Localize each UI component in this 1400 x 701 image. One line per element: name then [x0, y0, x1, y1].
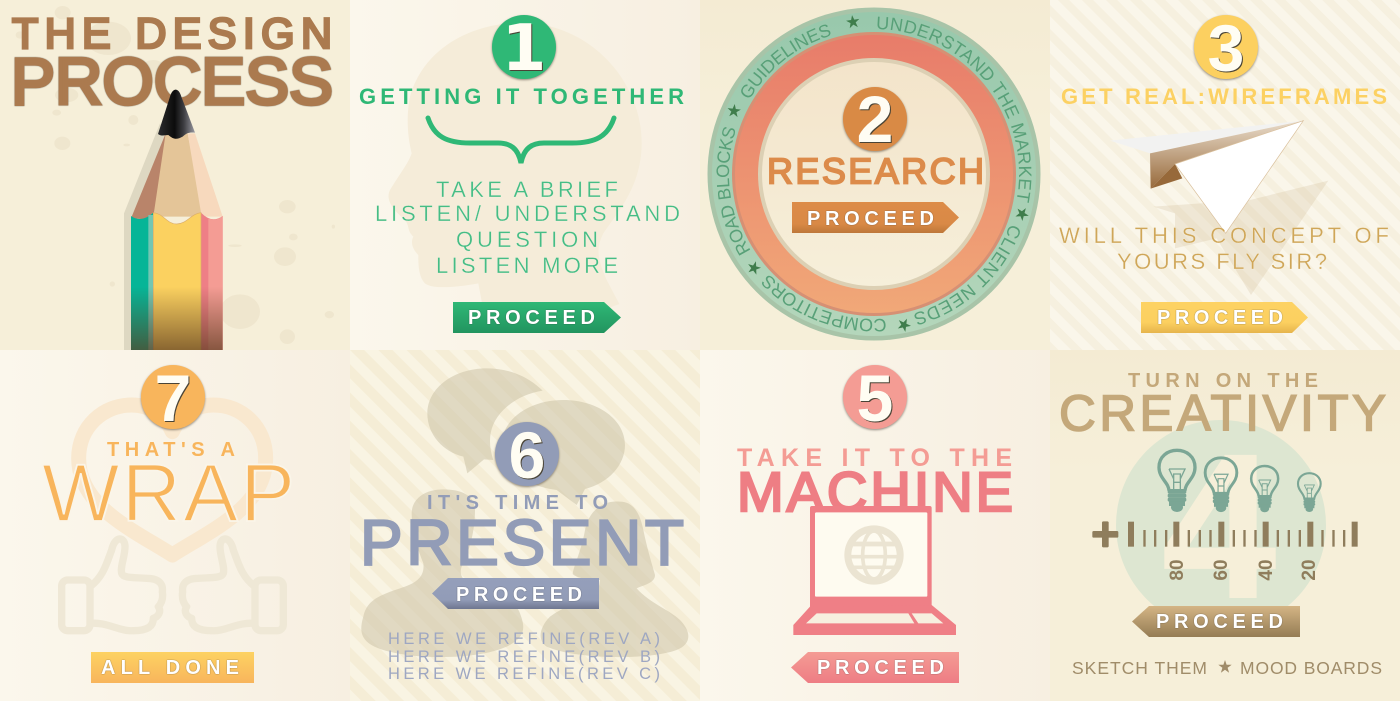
panel: step 2 research — [708, 8, 1040, 340]
green circle backdrop — [1116, 420, 1326, 630]
text block: refinement revisions: HERE WE REFINE(REV B) — [388, 648, 660, 666]
ring stars — [725, 14, 1030, 333]
icon: thumbs up pair — [62, 539, 283, 631]
text block: step 1 tasks: LISTEN/ UNDERSTAND — [375, 201, 680, 226]
panel: step 1 getting it together — [350, 0, 700, 350]
icon: laptop with globe — [793, 506, 956, 635]
heading: the design: THE DESIGN — [12, 10, 332, 58]
step number 7: 7 — [155, 361, 191, 435]
icon: speech bubbles — [427, 368, 625, 505]
text block: step 1 tasks: LISTEN MORE — [436, 253, 618, 278]
icon: paper plane — [1110, 121, 1303, 233]
panel: step 3 wireframes — [1050, 0, 1400, 350]
text block: step 1 tasks — [375, 177, 680, 278]
ring text: research topics — [716, 16, 1032, 332]
heading: wrap: WRAP — [42, 448, 295, 539]
step number 3 — [1194, 11, 1258, 85]
ring text: research topics: COMPETITORS — [762, 276, 886, 332]
text block: concept question: WILL THIS CONCEPT OF — [1059, 223, 1389, 248]
heading: present: PRESENT — [360, 506, 684, 578]
icon: pencil — [124, 90, 223, 351]
icon: head silhouette — [389, 23, 642, 310]
icon: curly brace — [428, 118, 614, 163]
step number 2: 2 — [857, 82, 893, 156]
chart labels: 80 60 40 20: 40 — [1256, 559, 1277, 581]
button: proceed — [1132, 606, 1300, 637]
icon: paper plane shadow — [1153, 181, 1328, 295]
step number 2 — [843, 82, 907, 156]
text block: concept question: YOURS FLY SIR? — [1117, 249, 1327, 274]
button: proceed — [1141, 302, 1308, 333]
text block: step 1 tasks: QUESTION — [456, 227, 598, 252]
heading: turn on the: TURN ON THE — [1128, 370, 1318, 392]
step number 6 — [495, 418, 559, 492]
step number 1: 1 — [502, 12, 546, 86]
step number 4: 4 — [1161, 411, 1277, 643]
step number 5 — [843, 361, 907, 435]
text block: concept question — [1059, 223, 1389, 274]
heading: process: PROCESS — [11, 44, 333, 118]
step number 6: 6 — [509, 418, 545, 492]
chart: brightness scale ruler — [1092, 521, 1358, 547]
text block: refinement revisions: HERE WE REFINE(REV C) — [388, 665, 660, 683]
panel: step 7 that's a wrap — [0, 350, 350, 701]
step number 5: 5 — [857, 361, 893, 435]
icon: heart outline — [79, 405, 266, 555]
ring text: research topics: GUIDELINES — [741, 24, 830, 98]
heading: get real wireframes: GET REAL:WIREFRAMES — [1061, 84, 1387, 109]
heading: take it to the: TAKE IT TO THE — [737, 444, 1012, 472]
button: proceed — [791, 652, 959, 683]
step number 7 — [141, 361, 205, 435]
icon: presenter silhouettes — [361, 489, 688, 657]
button: proceed: PROCEED — [1156, 611, 1283, 633]
paint splatter background — [16, 6, 335, 344]
button: proceed — [792, 202, 959, 233]
button: proceed: PROCEED — [807, 208, 934, 230]
text block: step 1 tasks: TAKE A BRIEF — [436, 177, 618, 202]
heading: getting it together: GETTING IT TOGETHER — [359, 84, 684, 109]
step number 3: 3 — [1208, 11, 1244, 85]
text block: sketch them, mood boards — [1072, 658, 1382, 678]
heading: that's a: THAT'S A — [107, 439, 235, 461]
button: proceed: PROCEED — [468, 307, 595, 329]
button: all done: ALL DONE — [101, 657, 239, 679]
chart labels: 80 60 40 20: 20 — [1299, 559, 1320, 581]
text block: sketch them, mood boards: SKETCH THEM — [1072, 658, 1207, 678]
heading: machine: MACHINE — [737, 460, 1013, 523]
step number 1 — [492, 12, 556, 86]
chart labels: 80 60 40 20: 80 — [1167, 559, 1188, 581]
ring text: research topics: UNDERSTAND THE MARKET — [878, 16, 1032, 203]
panel: step 4 turn on the creativity — [1050, 350, 1400, 701]
button: proceed: PROCEED — [1157, 307, 1283, 329]
button: all done — [91, 652, 254, 683]
heading: creativity: CREATIVITY — [1059, 384, 1386, 442]
panel: step 5 take it to the machine — [700, 350, 1050, 701]
panel: step 6 present — [350, 350, 700, 701]
ring text: research topics: CLIENT NEEDS — [914, 226, 1020, 324]
button: proceed — [453, 302, 621, 333]
button: proceed — [432, 578, 599, 609]
text block: refinement revisions: HERE WE REFINE(REV A) — [388, 630, 660, 648]
panel: the design process title — [0, 0, 350, 351]
chart labels: 80 60 40 20 — [1167, 559, 1320, 581]
ring text: research topics: ROAD BLOCKS — [716, 127, 750, 256]
button: proceed: PROCEED — [456, 584, 582, 606]
badge rings — [708, 8, 1040, 340]
text block: sketch them, mood boards: MOOD BOARDS — [1240, 658, 1382, 678]
button: proceed: PROCEED — [817, 657, 944, 679]
heading: it's time to: IT'S TIME TO — [427, 492, 608, 514]
chart labels: 80 60 40 20: 60 — [1211, 559, 1232, 581]
icon: light bulbs — [1159, 450, 1321, 512]
heading: research: RESEARCH — [767, 150, 984, 192]
text block: refinement revisions — [388, 630, 660, 683]
